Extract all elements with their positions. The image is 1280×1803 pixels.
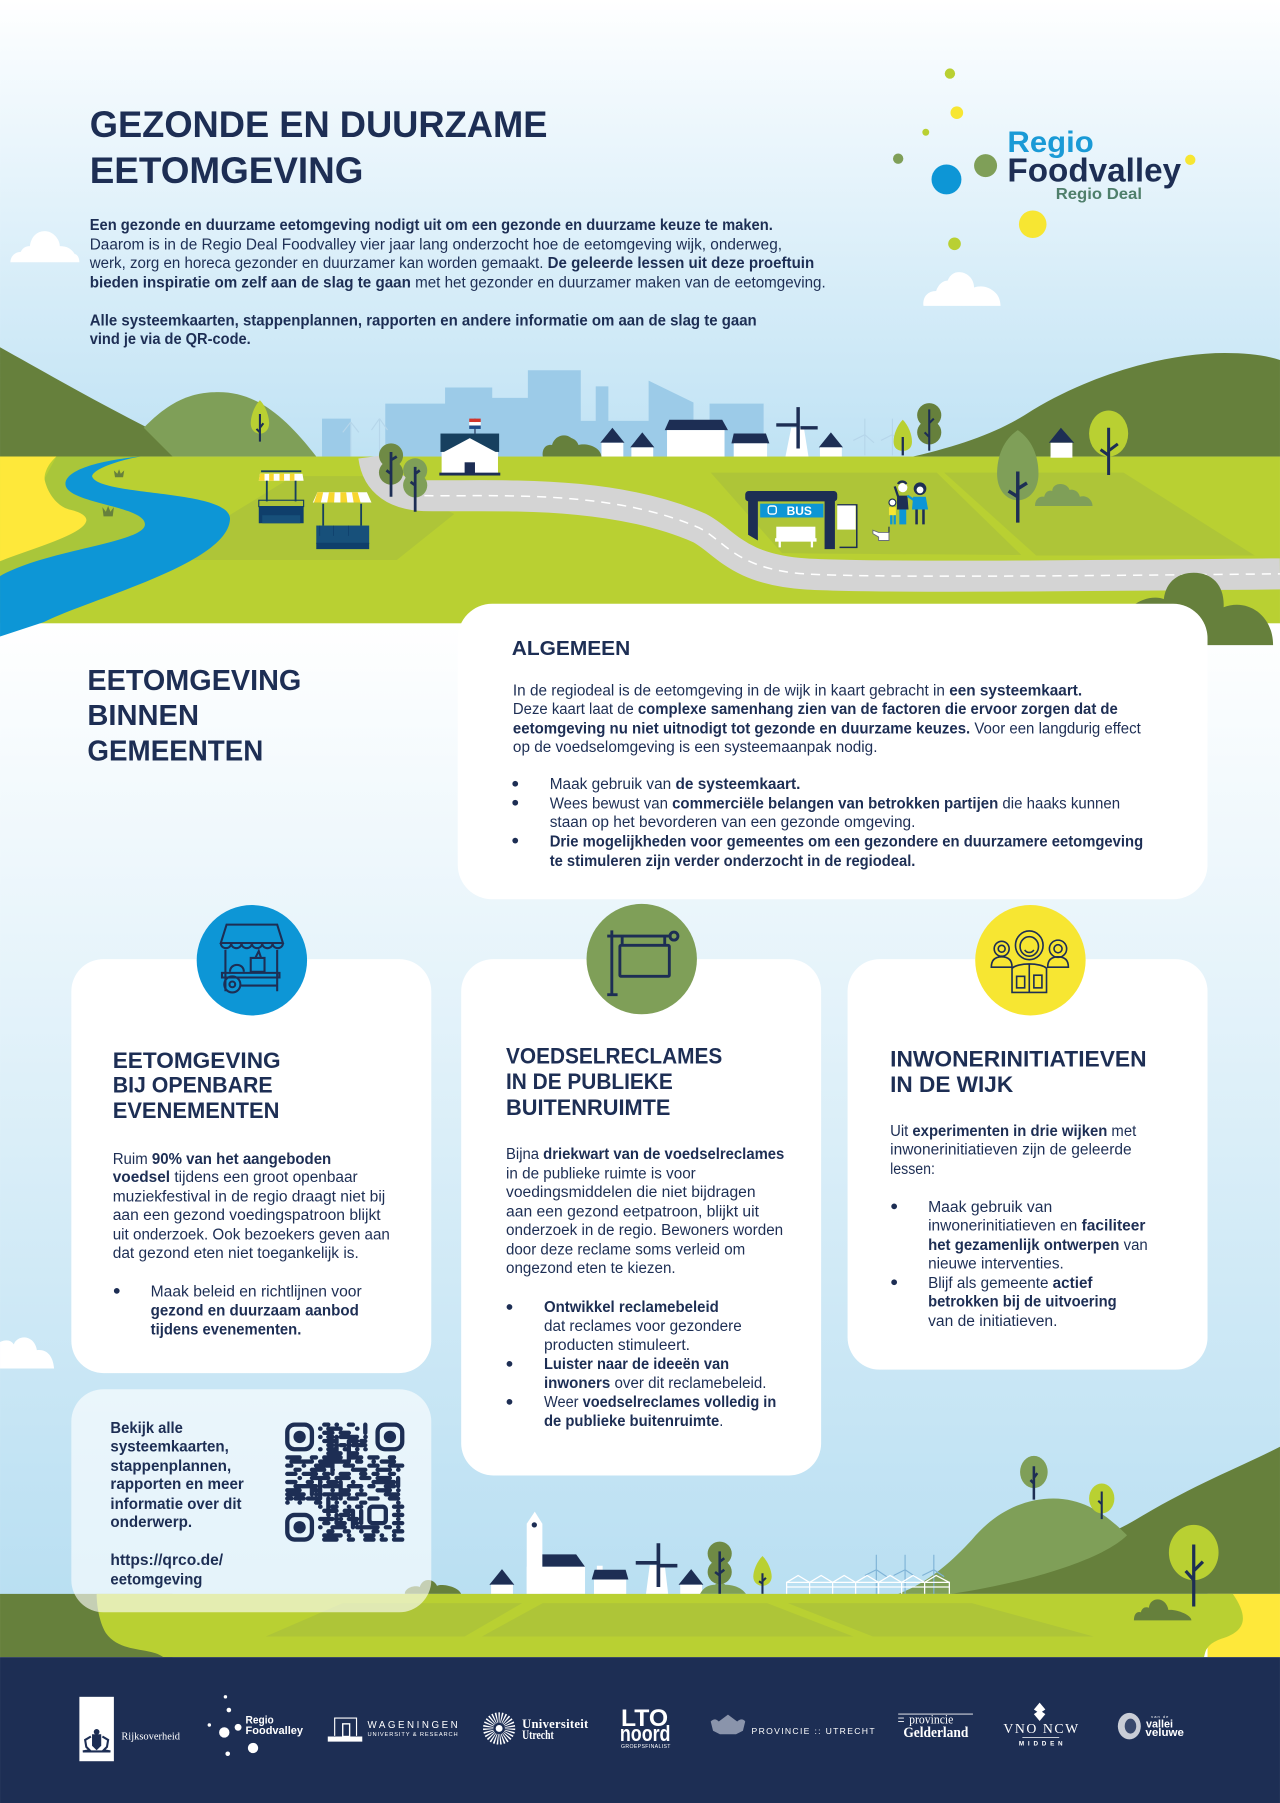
text inwonerinitiatieven: nieuwe interventies. — [928, 1255, 1064, 1272]
panel: algemeen — [458, 604, 1208, 899]
tree lime bottom — [753, 1556, 772, 1594]
market stall large — [313, 492, 371, 549]
family with dog — [873, 482, 928, 540]
windmill — [776, 407, 818, 457]
hill left — [0, 347, 207, 457]
footer logo: Regio Foodvalley: Foodvalley — [246, 1725, 304, 1737]
text evenementen: dat gezond eten niet toegankelijk is. — [113, 1245, 359, 1262]
text voedselreclames: door deze reclame soms verleid om — [506, 1242, 745, 1259]
intro text: werk, zorg en horeca gezonder en duurzamer kan worden gemaakt. De geleerde lessen uit deze proeftuin — [89, 255, 814, 272]
text evenementen: gezond en duurzaam aanbod — [151, 1303, 359, 1320]
algemeen text — [513, 683, 1141, 756]
footer logo: VNO NCW — [1003, 1703, 1078, 1748]
road — [374, 457, 1280, 576]
section heading: BINNEN — [87, 700, 199, 732]
field patches bottom — [266, 1603, 1094, 1636]
hill trees — [1020, 1456, 1114, 1519]
footer logo: Gelderland: Gelderland — [903, 1725, 969, 1741]
footer logo: Universiteit Utrecht — [488, 1717, 589, 1742]
qr text: stappenplannen, — [110, 1458, 231, 1475]
footer logo: Vallei Veluwe: van de — [1151, 1714, 1169, 1719]
logo Regio Foodvalley — [893, 68, 1195, 250]
intro text: Een gezonde en duurzame eetomgeving nodigt uit om een gezonde en duurzame keuze te maken. — [90, 217, 773, 234]
ground yellow right — [1208, 1594, 1280, 1657]
panel: evenementen — [71, 959, 431, 1373]
intro text — [89, 217, 826, 348]
algemeen text: op de voedselomgeving is een systeemaanpak nodig. — [513, 739, 877, 756]
algemeen bullets: Wees bewust van commerciële belangen van betrokken partijen die haaks kunnen — [550, 795, 1120, 812]
icon: advertising sign — [587, 904, 697, 1014]
intro text: Daarom is in de Regio Deal Foodvalley vier jaar lang onderzocht hoe de eetomgeving wijk, onderweg, — [90, 237, 782, 254]
footer logo: Wageningen: WAGENINGEN — [367, 1720, 458, 1731]
footer logo: Regio Foodvalley: Regio — [246, 1714, 274, 1726]
footer logo: Rijksoverheid: Rijksoverheid — [121, 1730, 181, 1742]
qr text: Bekijk alle — [110, 1420, 183, 1437]
city skyline — [322, 370, 764, 457]
text inwonerinitiatieven: het gezamenlijk ontwerpen van — [928, 1237, 1148, 1254]
text voedselreclames: in de publieke ruimte is voor — [506, 1166, 696, 1183]
text voedselreclames: Ontwikkel reclamebeleid — [544, 1299, 719, 1316]
wind turbines left — [343, 419, 388, 457]
text voedselreclames: Weer voedselreclames volledig in — [544, 1394, 776, 1411]
bush bottom right — [1134, 1599, 1191, 1620]
text evenementen: aan een gezond voedingspatroon blijkt — [113, 1207, 381, 1224]
text inwonerinitiatieven: betrokken bij de uitvoering — [928, 1293, 1117, 1310]
bush — [543, 435, 601, 457]
footer logo: Vallei Veluwe: veluwe — [1145, 1727, 1184, 1739]
heading evenementen: EETOMGEVING — [113, 1048, 281, 1073]
footer logo: LTO Noord: noord — [620, 1721, 670, 1746]
heading voedselreclames — [506, 1044, 722, 1120]
logo Regio Foodvalley: Regio — [1007, 126, 1094, 159]
bush right — [1035, 484, 1093, 506]
field patches — [711, 473, 1021, 555]
hill right — [913, 353, 1280, 457]
cloud left — [10, 231, 79, 262]
yellow field — [0, 457, 86, 561]
cloud lower left — [0, 1337, 54, 1368]
footer logo: LTO Noord: GROEPSFINALIST — [621, 1744, 671, 1750]
heading evenementen: BIJ OPENBARE — [113, 1072, 273, 1097]
text evenementen: tijdens evenementen. — [151, 1322, 301, 1339]
text voedselreclames: voedingsmiddelen die niet bijdragen — [506, 1184, 756, 1201]
qr text: eetomgeving — [110, 1572, 202, 1589]
tree on hill — [251, 400, 269, 442]
text inwonerinitiatieven: inwonerinitiatieven zijn de geleerde — [890, 1142, 1132, 1159]
market stall small — [259, 470, 304, 523]
heading voedselreclames: IN DE PUBLIEKE — [506, 1069, 673, 1094]
footer logo: Universiteit Utrecht: Utrecht — [522, 1728, 554, 1742]
village houses bottom — [489, 1566, 703, 1594]
text voedselreclames: aan een gezond eetpatroon, blijkt uit — [506, 1204, 760, 1221]
wind turbines bottom — [865, 1555, 944, 1594]
river bank — [0, 457, 145, 578]
church — [527, 1512, 585, 1594]
icon: residents — [975, 905, 1086, 1015]
footer logo: LTO Noord — [620, 1705, 671, 1750]
bus stop — [745, 491, 857, 549]
ground dark left — [0, 1594, 173, 1657]
logo Regio Foodvalley: Foodvalley — [1007, 153, 1182, 190]
section heading — [87, 665, 301, 768]
algemeen bullets: staan op het bevorderen van een gezonde omgeving. — [550, 814, 915, 831]
large tree bottom right — [1169, 1525, 1219, 1607]
algemeen bullets: Maak gebruik van de systeemkaart. — [550, 776, 800, 793]
text voedselreclames: de publieke buitenruimte. — [544, 1413, 723, 1430]
tree dark bottom — [700, 1542, 746, 1594]
tree large right — [997, 430, 1038, 523]
title — [90, 103, 547, 191]
small bush behind qr — [405, 1580, 461, 1594]
text voedselreclames: ongezond eten te kiezen. — [506, 1260, 676, 1277]
text evenementen: voedsel tijdens een groot openbaar — [113, 1169, 358, 1186]
tree dark village — [917, 403, 941, 451]
footer band — [0, 1657, 1280, 1803]
qr text: rapporten en meer — [110, 1476, 244, 1493]
intro text: vind je via de QR-code. — [90, 331, 251, 348]
footer logo: VNO NCW: MIDDEN — [1019, 1741, 1063, 1748]
windmill bottom — [636, 1543, 677, 1594]
footer logo: Wageningen — [328, 1718, 458, 1742]
text evenementen — [113, 1151, 390, 1339]
title: GEZONDE EN DUURZAME — [90, 103, 547, 145]
text inwonerinitiatieven: inwonerinitiatieven en faciliteer — [928, 1217, 1145, 1234]
algemeen text: eetomgeving nu niet uitnodigt tot gezonde en duurzame keuzes. Voor een langdurig effect — [513, 721, 1141, 738]
text voedselreclames: onderzoek in de regio. Bewoners worden — [506, 1222, 783, 1239]
background: top sky — [0, 0, 1280, 460]
heading inwonerinitiatieven: IN DE WIJK — [890, 1072, 1013, 1097]
text evenementen: Ruim 90% van het aangeboden — [113, 1151, 331, 1168]
hill dark — [951, 1447, 1280, 1594]
algemeen bullets — [512, 776, 1143, 870]
large bushes corner — [1129, 573, 1273, 645]
heading inwonerinitiatieven: INWONERINITIATIEVEN — [890, 1047, 1147, 1072]
cloud right — [923, 272, 1001, 306]
panel: inwonerinitiatieven — [848, 959, 1208, 1370]
footer logo: Regio Foodvalley — [208, 1695, 304, 1756]
heading voedselreclames: BUITENRUIMTE — [506, 1095, 671, 1120]
algemeen text: In de regiodeal is de eetomgeving in de wijk in kaart gebracht in een systeemkaart. — [513, 683, 1082, 700]
algemeen bullets: te stimuleren zijn verder onderzocht in de regiodeal. — [550, 853, 915, 870]
footer logo: Rijksoverheid — [79, 1697, 181, 1761]
algemeen bullets: Drie mogelijkheden voor gemeentes om een gezondere en duurzamere eetomgeving — [550, 833, 1143, 850]
title: EETOMGEVING — [90, 149, 363, 191]
qr text: systeemkaarten, — [110, 1438, 229, 1455]
heading voedselreclames: VOEDSELRECLAMES — [506, 1044, 722, 1069]
road trees — [379, 443, 427, 512]
bottom landscape — [0, 1447, 1280, 1657]
river — [0, 457, 230, 637]
footer logo: Vallei Veluwe — [1118, 1713, 1184, 1739]
heading evenementen — [113, 1048, 281, 1123]
text inwonerinitiatieven: van de initiatieven. — [928, 1313, 1057, 1330]
text voedselreclames: producten stimuleert. — [544, 1337, 690, 1354]
panel: qr code — [71, 1389, 431, 1612]
heading inwonerinitiatieven — [890, 1047, 1147, 1097]
footer logo: LTO Noord: LTO — [621, 1705, 668, 1732]
text inwonerinitiatieven: lessen: — [890, 1161, 935, 1178]
qr text: https://qrco.de/ — [110, 1552, 224, 1569]
greenhouse — [787, 1575, 949, 1594]
top landscape — [0, 347, 1280, 645]
hill medium — [898, 1498, 1127, 1594]
town hall — [439, 419, 500, 476]
middle hill — [144, 392, 316, 457]
footer logo: Wageningen: UNIVERSITY & RESEARCH — [367, 1732, 458, 1738]
text voedselreclames: Bijna driekwart van de voedselreclames — [506, 1146, 784, 1163]
tree lime village — [894, 420, 912, 455]
footer logo: Gelderland: provincie — [909, 1712, 953, 1726]
text evenementen: muziekfestival in de regio draagt niet bij — [113, 1189, 385, 1206]
section heading: EETOMGEVING — [87, 665, 301, 697]
text voedselreclames — [506, 1146, 784, 1430]
text voedselreclames: Luister naar de ideeën van — [544, 1356, 729, 1373]
tree lime right — [1089, 411, 1128, 475]
panel: voedselreclames — [461, 959, 821, 1475]
text evenementen: uit onderzoek. Ook bezoekers geven aan — [113, 1227, 390, 1244]
footer logo: Universiteit Utrecht: Universiteit — [522, 1717, 589, 1731]
text evenementen: Maak beleid en richtlijnen voor — [151, 1284, 362, 1301]
heading evenementen: EVENEMENTEN — [113, 1098, 279, 1123]
algemeen heading: ALGEMEEN — [512, 638, 630, 660]
ground field — [97, 1594, 1243, 1657]
algemeen text: Deze kaart laat de complexe samenhang zien van de factoren die ervoor zorgen dat de — [513, 701, 1118, 718]
icon: market cart — [197, 905, 307, 1015]
footer logo: Vallei Veluwe: vallei — [1146, 1718, 1173, 1730]
intro text: bieden inspiratie om zelf aan de slag te gaan met het gezonder en duurzamer maken van de eetomgeving. — [90, 274, 826, 291]
footer logo: VNO NCW: VNO NCW — [1003, 1721, 1078, 1736]
reeds — [102, 469, 124, 516]
intro text: Alle systeemkaarten, stappenplannen, rapporten en andere informatie om aan de slag te gaan — [90, 312, 757, 329]
text inwonerinitiatieven: Uit experimenten in drie wijken met — [890, 1123, 1137, 1140]
text voedselreclames: dat reclames voor gezondere — [544, 1318, 742, 1335]
logo Regio Foodvalley: Regio Deal — [1056, 186, 1142, 203]
house right — [1049, 428, 1074, 458]
text voedselreclames: inwoners over dit reclamebeleid. — [544, 1375, 766, 1392]
text inwonerinitiatieven — [890, 1123, 1148, 1330]
text inwonerinitiatieven: Blijf als gemeente actief — [928, 1275, 1093, 1292]
text inwonerinitiatieven: Maak gebruik van — [928, 1199, 1052, 1216]
wind turbines right — [853, 419, 902, 455]
qr text — [110, 1420, 244, 1589]
qr text: onderwerp. — [110, 1514, 192, 1531]
footer logo: Provincie Utrecht: PROVINCIE :: UTRECHT — [752, 1726, 875, 1736]
background: lower sky — [0, 621, 1280, 1598]
qr text: informatie over dit — [110, 1496, 242, 1513]
footer logo: Provincie Utrecht — [711, 1715, 875, 1736]
qr code — [287, 1425, 402, 1540]
section heading: GEMEENTEN — [87, 736, 263, 768]
bus stop: BUS — [787, 504, 812, 518]
ground — [0, 457, 1280, 623]
footer logo: Gelderland — [898, 1712, 973, 1741]
village houses — [600, 420, 843, 458]
road markings — [424, 496, 1280, 576]
